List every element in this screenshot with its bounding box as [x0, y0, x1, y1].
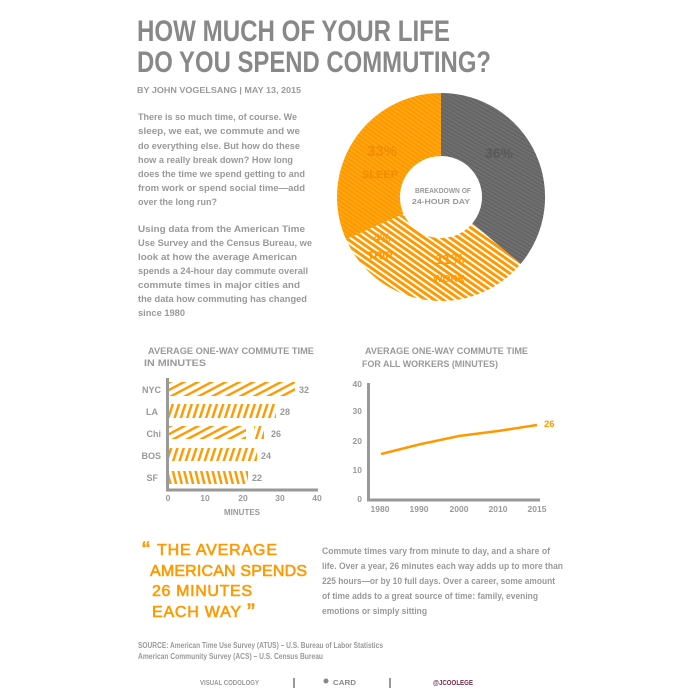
- commentary text block: of time adds to a great source of time: family, evening: [322, 591, 538, 602]
- donut chart: [337, 93, 545, 301]
- intro text block: Using data from the American Time: [138, 224, 305, 235]
- pull quote: ”: [247, 599, 255, 626]
- commentary text block: [322, 546, 563, 617]
- footer: [200, 678, 473, 687]
- slice: upper orange: [337, 93, 441, 239]
- intro text block: from work or spend social time—add: [138, 183, 305, 194]
- commentary text block: 225 hours—or by 10 full days. Over a career, some amount: [322, 576, 556, 587]
- commentary text block: Commute times vary from minute to day, and a share of: [322, 546, 551, 557]
- pull quote: “: [142, 537, 150, 564]
- footer icon and label: [324, 678, 357, 687]
- axes: [368, 383, 540, 500]
- byline: BY JOHN VOGELSANG | MAY 13, 2015: [137, 86, 302, 95]
- x tick labels: [166, 493, 322, 503]
- x tick labels: 30: [275, 493, 285, 503]
- axes: [168, 378, 318, 490]
- label: lower right slice: 11%: [435, 251, 465, 268]
- intro text block: look at how the average American: [138, 252, 297, 263]
- x tick labels: 2015: [528, 504, 547, 514]
- value labels: 22: [252, 473, 262, 483]
- label: upper orange slice: [362, 143, 398, 181]
- intro text block: how a really break down? How long: [138, 155, 293, 166]
- title: DO YOU SPEND COMMUTING?: [137, 46, 491, 79]
- bars: [168, 382, 295, 484]
- label: lower left slice: TRIP: [367, 250, 393, 262]
- value labels: 26: [271, 429, 281, 439]
- footer brand: VISUAL CODOLOGY: [200, 678, 259, 687]
- value labels: [252, 385, 309, 483]
- city labels: LA: [146, 407, 158, 417]
- intro text block: Use Survey and the Census Bureau, we: [138, 238, 312, 249]
- intro text block: There is so much time, of course. We: [138, 112, 297, 123]
- donut center label: [412, 186, 471, 206]
- value labels: 32: [299, 385, 309, 395]
- x tick labels: 10: [200, 493, 210, 503]
- intro text block: spends a 24-hour day commute overall: [138, 266, 308, 277]
- x tick labels: 2000: [450, 504, 469, 514]
- line chart heading: FOR ALL WORKERS (MINUTES): [362, 359, 498, 369]
- label: lower right slice: [433, 251, 466, 285]
- intro text block: [138, 112, 312, 319]
- x tick labels: 20: [238, 493, 248, 503]
- end value label: 26: [544, 419, 555, 430]
- line chart: commute over time: [353, 379, 555, 514]
- label: gray slice: 36%: [485, 145, 514, 161]
- intro text block: over the long run?: [138, 197, 217, 208]
- x axis title: MINUTES: [224, 508, 261, 517]
- y tick labels: 20: [353, 436, 362, 446]
- intro text block: sleep, we eat, we commute and we: [138, 126, 300, 137]
- x tick labels: 2010: [489, 504, 508, 514]
- value labels: 28: [280, 407, 290, 417]
- label: upper orange slice: SLEEP: [362, 169, 398, 181]
- bar chart heading: AVERAGE ONE-WAY COMMUTE TIME: [148, 346, 314, 356]
- city labels: Chi: [146, 429, 161, 439]
- label: lower right slice: WORK: [433, 274, 466, 285]
- slice: lower orange: [346, 214, 521, 301]
- trend line: [381, 425, 537, 454]
- intro text block: since 1980: [138, 308, 185, 319]
- city labels: SF: [146, 473, 158, 483]
- intro text block: do everything else. But how do these: [138, 141, 300, 152]
- pull quote: THE AVERAGE: [157, 542, 277, 559]
- footer icon and label: CARD: [333, 678, 357, 687]
- bar chart: commute by city: [141, 378, 322, 517]
- bar chart heading: [144, 346, 314, 368]
- y tick labels: 10: [353, 465, 362, 475]
- commentary text block: life. Over a year, 26 minutes each way adds up to more than: [322, 561, 563, 572]
- label: lower left slice: [367, 231, 393, 262]
- pull quote: 26 MINUTES: [152, 583, 252, 600]
- sources: American Community Survey (ACS) – U.S. Census Bureau: [138, 652, 323, 661]
- x tick labels: 1980: [371, 504, 390, 514]
- x tick labels: [371, 504, 547, 514]
- city labels: NYC: [142, 385, 161, 395]
- line chart heading: [362, 346, 528, 369]
- x tick labels: 0: [166, 493, 171, 503]
- label: upper orange slice: 33%: [367, 143, 397, 160]
- city labels: [141, 385, 161, 483]
- intro text block: does the time we spend getting to and: [138, 169, 305, 180]
- intro text block: commute times in major cities and: [138, 280, 300, 291]
- y tick labels: 30: [353, 406, 362, 416]
- donut center label: BREAKDOWN OF: [415, 186, 471, 195]
- value labels: 24: [261, 451, 271, 461]
- line chart heading: AVERAGE ONE-WAY COMMUTE TIME: [365, 346, 528, 356]
- bar chart heading: IN MINUTES: [144, 358, 206, 368]
- sources: SOURCE: American Time Use Survey (ATUS) – U.S. Bureau of Labor Statistics: [138, 641, 383, 650]
- pull quote: [142, 537, 307, 626]
- city labels: BOS: [141, 451, 161, 461]
- commentary text block: emotions or simply sitting: [322, 606, 427, 617]
- y tick labels: [353, 379, 362, 504]
- donut center label: 24-HOUR DAY: [412, 197, 470, 206]
- x tick labels: 40: [312, 493, 322, 503]
- x tick labels: 1990: [410, 504, 429, 514]
- footer handle: @JCOOLEGE: [433, 678, 473, 687]
- title: [137, 15, 491, 79]
- label: lower left slice: 4%: [373, 231, 391, 245]
- intro text block: the data how commuting has changed: [138, 294, 307, 305]
- pull quote: EACH WAY: [152, 604, 241, 621]
- slice: gray: [441, 93, 545, 264]
- sources: [138, 641, 383, 661]
- y tick labels: 0: [357, 494, 362, 504]
- pull quote: AMERICAN SPENDS: [150, 563, 307, 580]
- y tick labels: 40: [353, 379, 362, 389]
- title: HOW MUCH OF YOUR LIFE: [137, 15, 450, 48]
